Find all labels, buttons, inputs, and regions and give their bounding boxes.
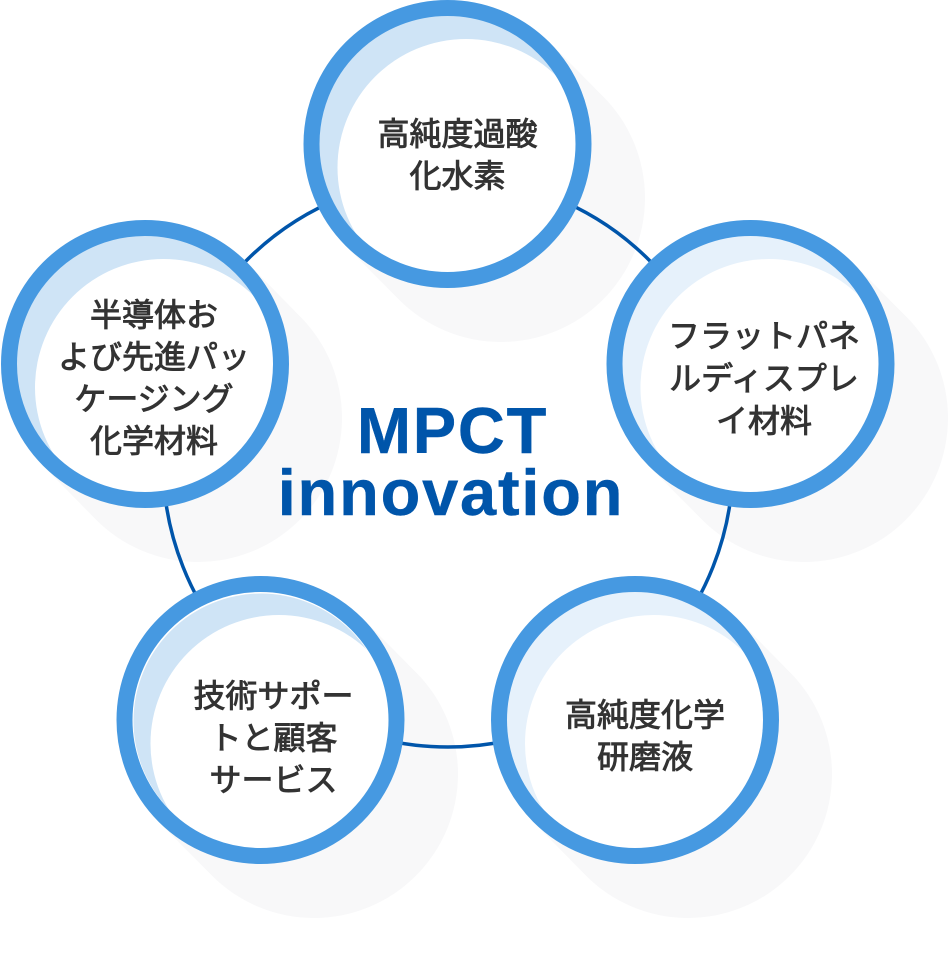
- node: semiconductor and advanced packaging chemicals: [9, 228, 292, 516]
- title: innovation: [278, 456, 624, 529]
- node: flat panel display materials: ルディスプレ: [669, 360, 859, 396]
- node: high purity hydrogen peroxide: [312, 8, 594, 296]
- node: technical support and customer service: トと顧客: [209, 720, 338, 756]
- title: MPCT: [357, 394, 548, 467]
- node: flat panel display materials: [614, 228, 898, 516]
- connecting ring: [163, 177, 733, 747]
- node: semiconductor and advanced packaging chemicals: よび先進パッ: [58, 339, 250, 375]
- node: high purity hydrogen peroxide: 高純度過酸: [377, 116, 538, 152]
- node: flat panel display materials: フラットパネ: [668, 318, 860, 354]
- node: high purity chemical polishing slurry: [499, 584, 782, 872]
- node: high purity chemical polishing slurry: 研磨液: [597, 739, 693, 775]
- node: high purity chemical polishing slurry: 高純度化学: [565, 697, 725, 733]
- node: technical support and customer service: 技術サポー: [193, 678, 354, 714]
- background shadows: [145, 144, 804, 774]
- node: technical support and customer service: [124, 584, 408, 872]
- node: semiconductor and advanced packaging chemicals: 化学材料: [90, 423, 218, 459]
- node: semiconductor and advanced packaging chemicals: 半導体お: [90, 297, 218, 333]
- node: technical support and customer service: サービス: [209, 762, 338, 798]
- node: flat panel display materials: イ材料: [716, 403, 812, 439]
- node: high purity hydrogen peroxide: 化水素: [409, 158, 506, 194]
- node: semiconductor and advanced packaging chemicals: ケージング: [74, 381, 234, 417]
- title: [278, 394, 624, 529]
